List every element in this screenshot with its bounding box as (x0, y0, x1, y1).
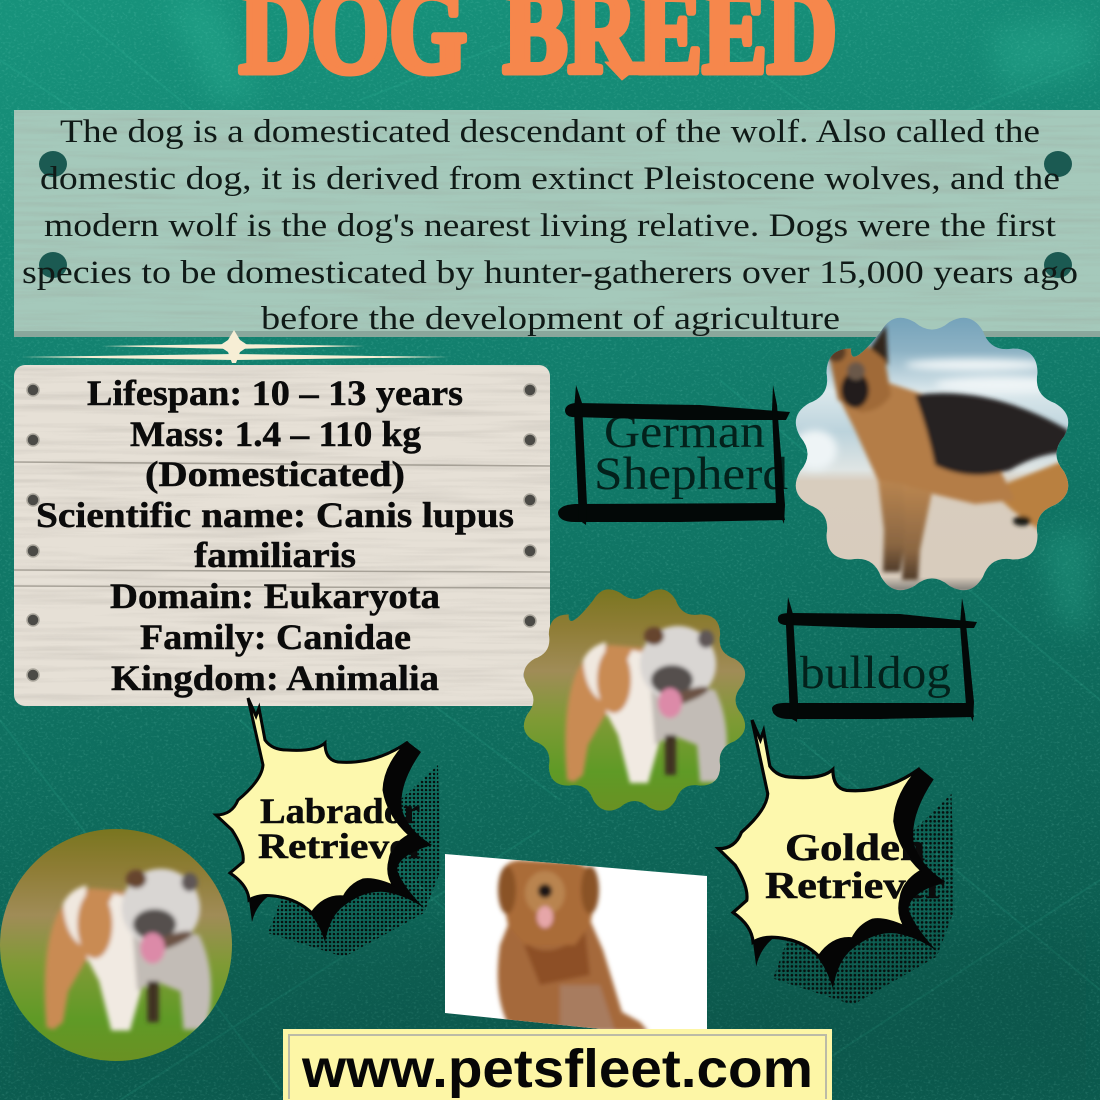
introduction text: The dog is a domesticated descendant of the wolf. Also called the (60, 114, 1040, 150)
callout text: Golden Retriever (765, 827, 945, 907)
label: German Shepherd (558, 385, 790, 525)
introduction text: species to be domesticated by hunter-gatherers over 15,000 years ago (22, 255, 1078, 291)
facts text: Mass: 1.4 – 110 kg (130, 414, 421, 454)
banner: website (283, 1029, 832, 1100)
callout text: Labrador Retriever: Labrador (260, 791, 420, 831)
label: German Shepherd: Shepherd (594, 448, 788, 500)
website url: www.petsfleet.com (301, 1039, 813, 1099)
photo: golden retriever (440, 850, 710, 1035)
facts text: Family: Canidae (140, 617, 411, 657)
facts text: familiaris (194, 535, 356, 575)
callout: Golden Retriever (718, 720, 955, 1005)
photo: German Shepherd (796, 318, 1068, 590)
callout: Labrador Retriever (216, 698, 441, 957)
brush frame: bulldog (772, 597, 977, 722)
title (239, 0, 837, 99)
nails on introduction panel (39, 151, 1072, 278)
facts text: Kingdom: Animalia (111, 658, 439, 698)
introduction text (22, 114, 1078, 337)
panel: facts (14, 365, 550, 706)
facts text: (Domesticated) (145, 454, 405, 494)
plank lines (14, 462, 550, 588)
callout text: Golden Retriever: Golden (785, 827, 925, 869)
brush frame: German Shepherd (558, 385, 790, 525)
panel: introduction (14, 110, 1100, 337)
introduction text: before the development of agriculture (261, 301, 840, 337)
facts text: Lifespan: 10 – 13 years (87, 373, 463, 413)
introduction text: modern wolf is the dog's nearest living relative. Dogs were the first (44, 208, 1056, 244)
facts text: Scientific name: Canis lupus (36, 495, 514, 535)
introduction text: domestic dog, it is derived from extinct Pleistocene wolves, and the (40, 161, 1060, 197)
label: bulldog (772, 597, 977, 722)
facts text: Domain: Eukaryota (110, 576, 440, 616)
callout text: Labrador Retriever: Retriever (258, 826, 426, 866)
callout text: Golden Retriever: Retriever (765, 865, 945, 907)
nails on facts panel (27, 384, 536, 681)
facts text (36, 373, 514, 698)
photo: bulldog in circle (0, 821, 240, 1069)
label: bulldog: bulldog (800, 647, 951, 699)
label: German Shepherd: German (604, 406, 765, 458)
ornament: sparkle divider (21, 330, 449, 363)
photo: bulldog in scalloped frame (524, 589, 746, 811)
callout text: Labrador Retriever (258, 791, 426, 866)
